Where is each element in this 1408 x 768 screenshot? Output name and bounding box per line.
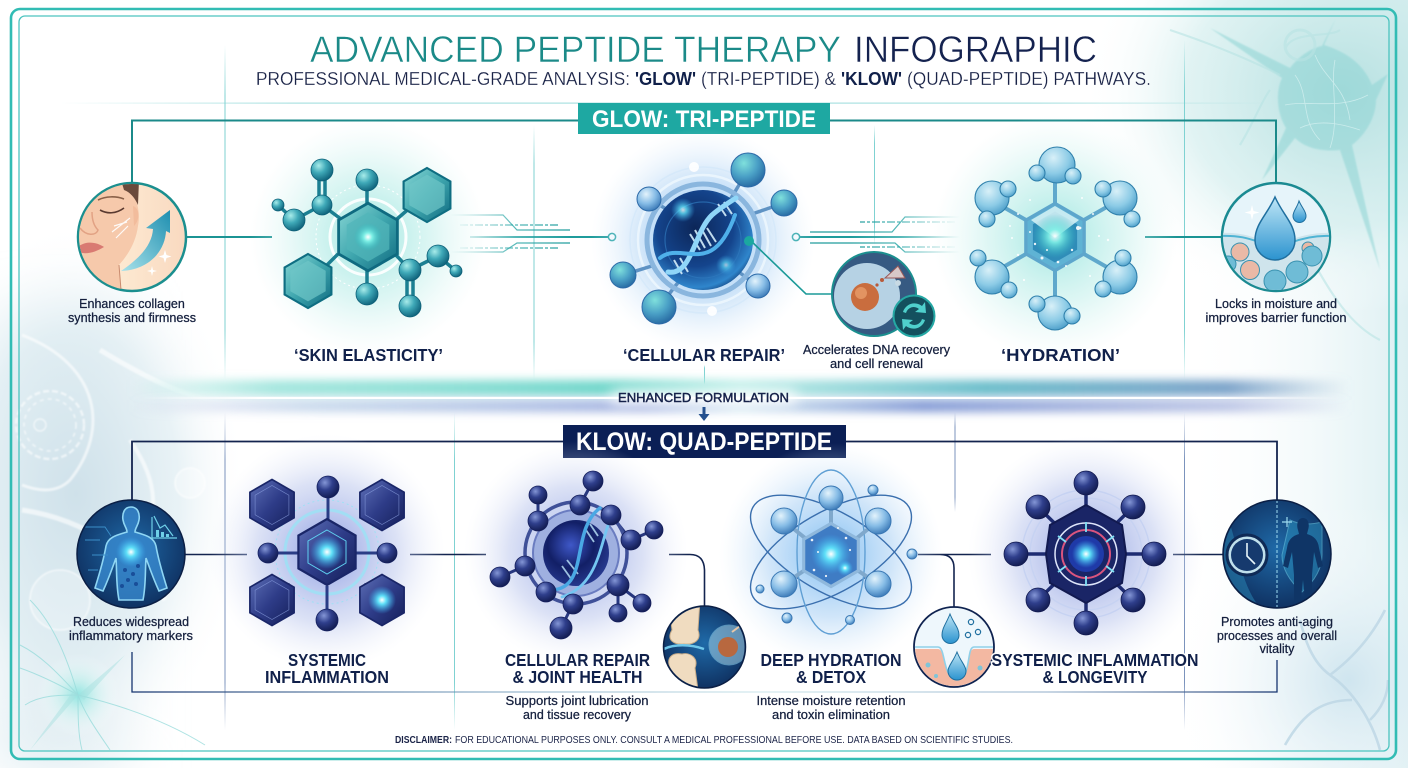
- text: inflammatory caption: Reduces widespread: [73, 615, 189, 629]
- molecule: cellular repair: [591, 128, 815, 352]
- bottom bracket: [132, 652, 1277, 692]
- icon: skin hydration drops: [912, 607, 996, 690]
- label: cellular repair and joint health: & JOINT HEALTH: [512, 667, 642, 687]
- label: systemic inflammation and longevity: [992, 650, 1198, 687]
- text: anti-aging caption: Promotes anti-aging: [1221, 615, 1333, 629]
- text: anti-aging caption: vitality: [1260, 642, 1295, 656]
- label: systemic inflammation: [265, 650, 389, 687]
- heading: GLOW badge: GLOW: TRI-PEPTIDE: [592, 106, 816, 133]
- text: collagen caption: Enhances collagen: [79, 297, 185, 311]
- guide lines: [60, 40, 1270, 730]
- divider band: enhanced formulation: [130, 380, 1350, 421]
- text: anti-aging caption: processes and overall: [1217, 629, 1337, 643]
- text: joint caption: Supports joint lubrication: [506, 694, 649, 708]
- label: skin elasticity: ‘SKIN ELASTICITY’: [294, 345, 443, 365]
- icon: knee joint: [664, 600, 749, 690]
- disclaimer: DISCLAIMER:: [395, 735, 452, 746]
- subtitle: 'KLOW': [841, 69, 902, 89]
- text: detox caption: [756, 694, 906, 722]
- text: collagen caption: synthesis and firmness: [68, 311, 196, 325]
- circuit lines right: [792, 217, 960, 252]
- text: collagen caption: [68, 297, 196, 325]
- label: hydration: ‘HYDRATION’: [1001, 345, 1120, 365]
- label: cellular repair: ‘CELLULAR REPAIR’: [623, 345, 785, 365]
- label: systemic inflammation: INFLAMMATION: [265, 667, 389, 687]
- text: DNA caption: and cell renewal: [830, 357, 923, 371]
- label: systemic inflammation and longevity: & LONGEVITY: [1042, 667, 1148, 687]
- panel: KLOW quad-peptide: [69, 425, 1337, 722]
- molecule: skin elasticity: [250, 119, 486, 355]
- subtitle: PROFESSIONAL MEDICAL-GRADE ANALYSIS:: [256, 69, 630, 89]
- label: cellular repair and joint health: [505, 650, 650, 687]
- connector lines: [186, 236, 1224, 238]
- heading: KLOW badge: KLOW: QUAD-PEPTIDE: [576, 428, 832, 456]
- text: DNA caption: Accelerates DNA recovery: [803, 343, 951, 357]
- text: joint caption: and tissue recovery: [523, 708, 632, 722]
- label: deep hydration and detox: [760, 650, 902, 687]
- molecule: hydration: [933, 115, 1177, 359]
- arrow: down to KLOW: [698, 407, 710, 421]
- molecule: systemic inflammation and longevity: [968, 436, 1204, 672]
- molecule: cellular repair and joint health: [464, 441, 688, 665]
- text: moisture caption: Locks in moisture and: [1215, 297, 1337, 311]
- icon: water drop on skin barrier: [1220, 183, 1332, 295]
- title: ADVANCED PEPTIDE THERAPY: [310, 29, 841, 70]
- label: systemic inflammation and longevity: SYSTEMIC INFLAMMATION: [992, 650, 1198, 670]
- icon: body inflammation scan: [77, 500, 185, 608]
- molecule: systemic inflammation: [209, 434, 445, 670]
- subtitle: (QUAD-PEPTIDE) PATHWAYS.: [907, 69, 1151, 89]
- text: anti-aging caption: [1217, 615, 1337, 656]
- text: enhanced formulation: ENHANCED FORMULATION: [618, 391, 789, 405]
- text: detox caption: Intense moisture retention: [756, 694, 906, 708]
- subtitle: [256, 69, 1151, 89]
- callout connector: DNA recovery: [744, 236, 834, 294]
- subtitle: (TRI-PEPTIDE) &: [701, 69, 836, 89]
- label: cellular repair and joint health: CELLULAR REPAIR: [505, 650, 650, 670]
- text: joint caption: [506, 694, 649, 722]
- circuit lines left: [450, 215, 616, 252]
- label: deep hydration and detox: DEEP HYDRATION: [760, 650, 902, 670]
- icon: cell renewal: [832, 252, 934, 336]
- molecule: deep hydration and detox: [719, 443, 943, 667]
- text: inflammatory caption: [69, 615, 193, 643]
- icon: clock and shielded body: [1223, 500, 1331, 610]
- subtitle: 'GLOW': [635, 69, 696, 89]
- disclaimer: FOR EDUCATIONAL PURPOSES ONLY. CONSULT A MEDICAL PROFESSIONAL BEFORE USE. DATA BASED ON SCIENTIFIC STUDIES.: [455, 735, 1013, 746]
- text: moisture caption: [1206, 297, 1347, 325]
- label: systemic inflammation: SYSTEMIC: [288, 650, 366, 670]
- text: detox caption: and toxin elimination: [772, 708, 890, 722]
- connector lines: [185, 554, 1224, 608]
- text: inflammatory caption: inflammatory markers: [69, 629, 193, 643]
- label: deep hydration and detox: & DETOX: [796, 667, 866, 687]
- icon: face with upward arrow: [70, 178, 186, 295]
- text: moisture caption: improves barrier function: [1206, 311, 1347, 325]
- panel: GLOW tri-peptide: [68, 103, 1347, 371]
- title: INFOGRAPHIC: [854, 29, 1097, 70]
- text: DNA caption: [803, 343, 951, 371]
